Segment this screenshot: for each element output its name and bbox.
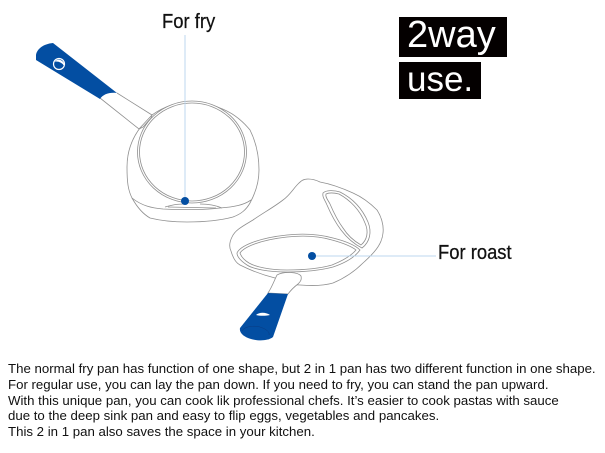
label: For fry: For fry	[162, 11, 215, 33]
description text: For regular use, you can lay the pan down. If you need to fry, you can stand the pan upward.	[8, 377, 548, 392]
label: For roast: For roast	[438, 242, 512, 264]
blue handle, roast pan	[240, 293, 288, 340]
roast pointer dot	[308, 252, 316, 260]
fry pan, standing	[100, 93, 259, 222]
inner ring	[138, 101, 246, 203]
description text: The normal fry pan has function of one shape, but 2 in 1 pan has two different function in one shape.	[8, 361, 596, 376]
pan base contour	[132, 198, 251, 210]
description text: With this unique pan, you can cook lik professional chefs. It’s easier to cook pastas with sauce	[8, 392, 559, 408]
pan body	[230, 179, 383, 286]
fry pointer line	[184, 35, 186, 201]
fry pointer dot	[181, 197, 189, 205]
neck of handle	[268, 272, 301, 294]
description text	[8, 361, 596, 439]
roast pan, lying	[230, 179, 383, 294]
neck of handle	[100, 93, 152, 129]
handle hole	[54, 58, 64, 70]
pan cooking surface	[237, 234, 360, 272]
pan body	[127, 102, 259, 222]
description text: This 2 in 1 pan also saves the space in your kitchen.	[8, 424, 315, 439]
roast pointer line	[312, 255, 436, 257]
upper handle cut-out	[323, 191, 370, 248]
blue handle, fry pan	[36, 43, 117, 99]
handle hole	[256, 313, 270, 316]
description text: due to the deep sink pan and easy to flip eggs, vegetables and pancakes.	[8, 408, 439, 423]
